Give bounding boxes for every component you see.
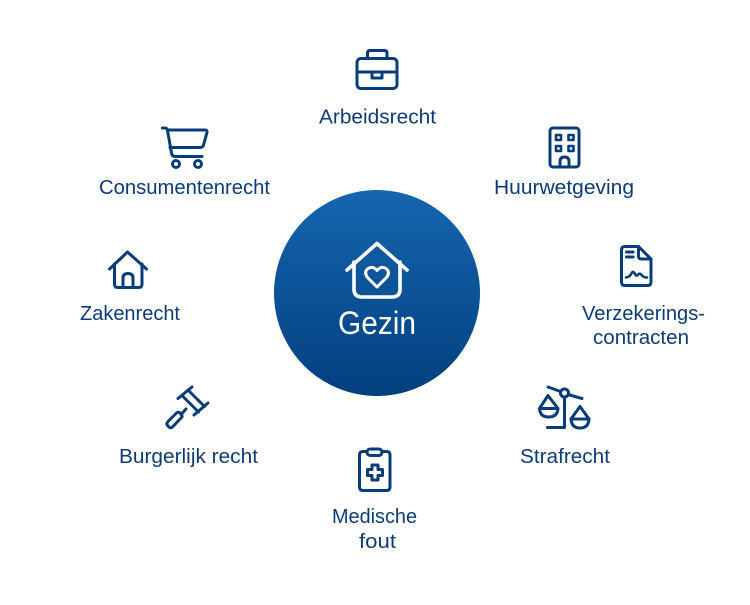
item: Verzekeringscontracten: contracten bbox=[593, 327, 689, 349]
hub circle bbox=[274, 190, 480, 396]
item: Strafrecht bbox=[520, 387, 610, 468]
hub label: Gezin bbox=[338, 305, 416, 341]
item: Huurwetgeving bbox=[494, 128, 634, 199]
label: Burgerlijk recht bbox=[119, 446, 258, 468]
label: Verzekerings- bbox=[582, 303, 705, 325]
item: Consumentenrecht bbox=[99, 128, 270, 199]
icon: briefcase bbox=[357, 50, 397, 88]
icon: gavel bbox=[167, 387, 208, 428]
label: Strafrecht bbox=[520, 446, 610, 468]
icon: clipboard with cross bbox=[360, 449, 390, 490]
icon: shopping cart bbox=[162, 128, 207, 168]
icon: document with signature bbox=[622, 246, 651, 286]
label: Huurwetgeving bbox=[494, 177, 634, 199]
label: Medische bbox=[332, 506, 417, 528]
item: Medische fout bbox=[332, 449, 417, 553]
item: Burgerlijk recht bbox=[119, 387, 258, 468]
item: Zakenrecht bbox=[80, 252, 180, 325]
icon: scales bbox=[540, 387, 589, 428]
item: Arbeidsrecht bbox=[319, 50, 436, 128]
icon: house with heart bbox=[347, 244, 407, 297]
label: Arbeidsrecht bbox=[319, 106, 436, 128]
icon: building bbox=[550, 128, 579, 167]
item: Medische fout: fout bbox=[359, 531, 396, 553]
central hub: Gezin bbox=[274, 190, 480, 396]
icon: house bbox=[110, 252, 146, 288]
label: Zakenrecht bbox=[80, 303, 180, 325]
label: Consumentenrecht bbox=[99, 177, 270, 199]
item: Verzekeringscontracten bbox=[582, 246, 705, 349]
